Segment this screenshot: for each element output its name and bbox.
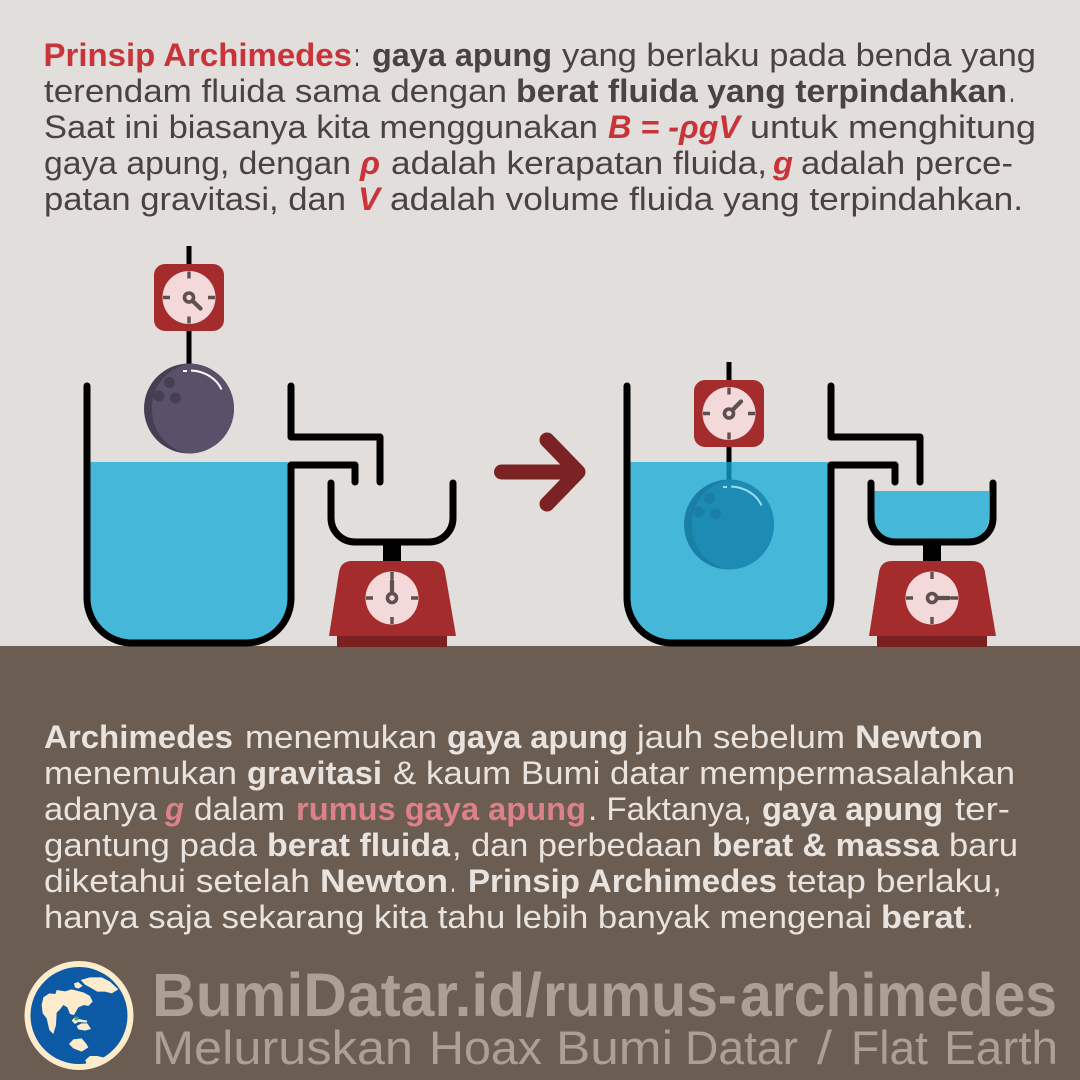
text block: history and explanation: diketahui setelah [44,863,310,899]
text block: history and explanation: tetap berlaku, [787,863,1002,899]
diagram: ball submerged, displaced water in pan [627,362,996,647]
text block: history and explanation: menemukan [44,755,237,791]
diagram: ball above full beaker [87,246,456,647]
text block: definition of Archimedes principle: terendam fluida sama dengan [44,73,507,109]
footer tagline: Datar [685,1021,798,1074]
text block: history and explanation: Prinsip Archimedes [468,863,777,899]
text block: history and explanation: gantung pada [44,827,258,863]
hanging wire [726,362,732,482]
text block: history and explanation [44,719,1018,935]
water in beaker [630,462,828,640]
text block: definition of Archimedes principle: untuk menghitung [750,109,1036,145]
background: light upper area [0,0,1080,647]
text block: history and explanation: dalam [194,791,285,827]
text block: history and explanation: Newton [320,863,448,899]
footer tagline: Flat [851,1021,928,1074]
text block: definition of Archimedes principle: adalah kerapatan fluida, [391,145,767,181]
water in beaker [90,462,288,640]
submerged ball [684,480,774,570]
text block: history and explanation: baru [949,827,1018,863]
spring gauge [154,264,224,331]
text block: history and explanation: berat [881,899,965,935]
text block: history and explanation: hanya saja sekarang kita tahu lebih banyak mengenai [44,899,872,935]
text block: definition of Archimedes principle: gaya apung, dengan [44,145,351,181]
text block: history and explanation: berat & massa [712,827,940,863]
text block: definition of Archimedes principle: patan gravitasi, dan [44,181,346,217]
beaker with spout [627,386,920,643]
text block: history and explanation: rumus gaya apung [296,791,586,827]
text block: history and explanation: , dan perbedaan [452,827,702,863]
hanging wire [186,246,192,368]
text block: history and explanation: gaya apung [762,791,943,827]
text block: history and explanation: berat fluida [267,827,451,863]
text block: history and explanation: jauh sebelum [636,719,845,755]
text block: definition of Archimedes principle: : [354,37,360,73]
footer url [152,961,1057,1029]
panel: dark lower area [0,646,1080,1080]
text block: history and explanation: . Faktanya, [588,791,752,827]
beaker with spout [87,386,380,643]
text block: history and explanation: & kaum Bumi datar mempermasalahkan [393,755,1015,791]
text block: definition of Archimedes principle: adalah perce- [801,145,1013,181]
spring gauge [694,380,764,447]
text block: definition of Archimedes principle: Saat ini biasanya kita menggunakan [44,109,598,145]
text block: history and explanation: menemukan [245,719,437,755]
text block: definition of Archimedes principle: B = -ρgV [608,109,742,145]
text block: definition of Archimedes principle: gaya apung [372,37,552,73]
text block: definition of Archimedes principle: . [1009,73,1015,109]
footer tagline [152,1021,1058,1074]
text block: history and explanation: . [967,899,973,935]
text block: history and explanation: Newton [855,719,983,755]
text block: definition of Archimedes principle: Prinsip Archimedes [44,37,352,73]
text block: history and explanation: gravitasi [247,755,382,791]
text block: history and explanation: . [450,863,456,899]
icon: globe logo [24,961,134,1070]
text block: definition of Archimedes principle: g [772,145,793,181]
text block: definition of Archimedes principle: berat fluida yang terpindahkan [516,73,1007,109]
footer tagline: Bumi [556,1021,673,1074]
footer tagline: Hoax [429,1021,542,1074]
footer tagline: / [817,1021,833,1074]
text block: history and explanation: adanya [44,791,158,827]
text block: definition of Archimedes principle: ρ [359,145,380,181]
text block: definition of Archimedes principle [44,37,1036,217]
arrow [502,440,578,504]
kitchen scale, pan with water [869,483,996,647]
ball [144,364,234,454]
kitchen scale, empty pan [329,483,456,647]
text block: history and explanation: Archimedes [44,719,233,755]
text block: definition of Archimedes principle: adalah volume fluida yang terpindahkan. [390,181,1023,217]
text block: definition of Archimedes principle: V [358,181,382,217]
footer url: rumus- [543,961,737,1029]
text block: history and explanation: ter- [955,791,1010,827]
footer url: archimedes [740,961,1057,1029]
footer tagline: Meluruskan [152,1021,413,1074]
footer url: BumiDatar.id/ [152,961,542,1029]
text block: definition of Archimedes principle: yang berlaku pada benda yang [562,37,1036,73]
text block: history and explanation: gaya apung [447,719,628,755]
footer tagline: Earth [944,1021,1058,1074]
text block: history and explanation: g [164,791,184,827]
